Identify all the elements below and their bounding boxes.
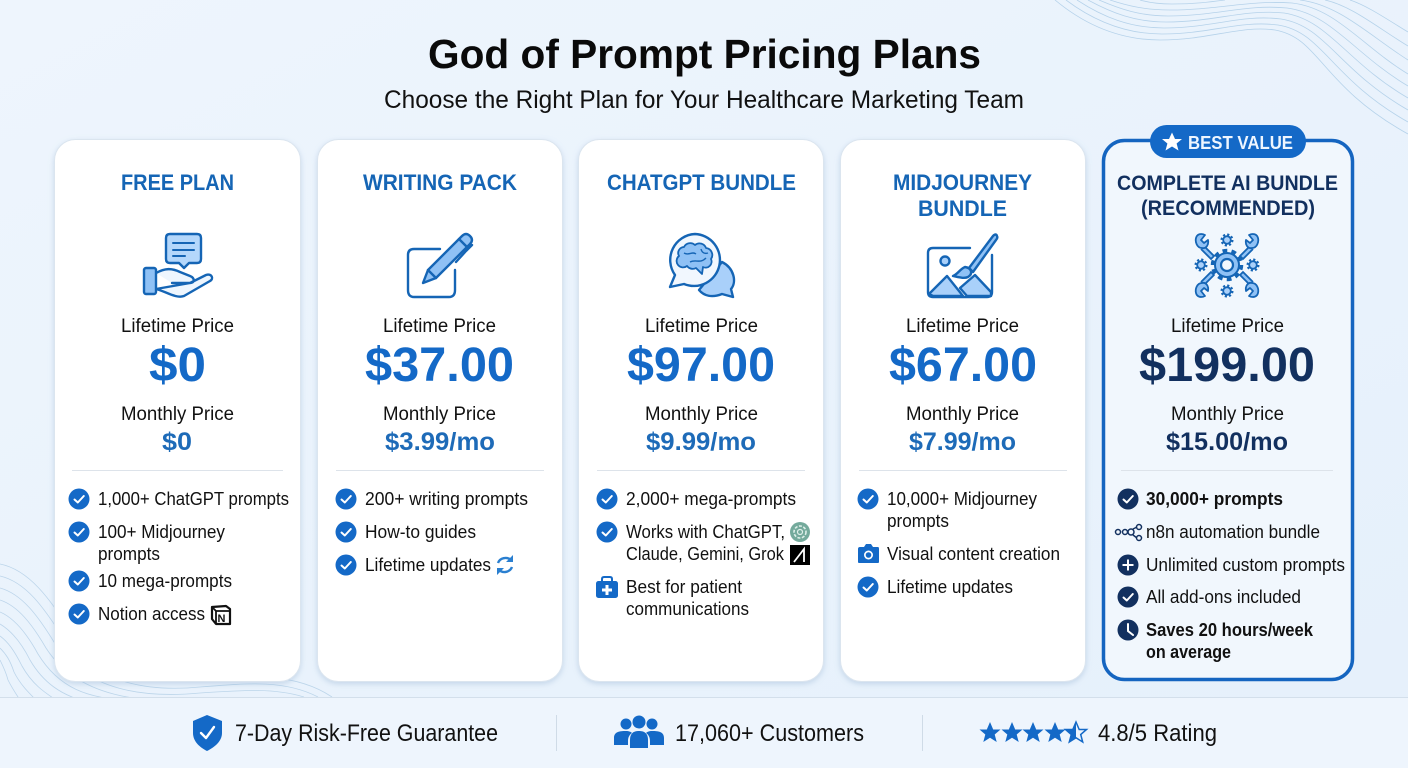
feature: saves 20 hours per week: on average [1146, 642, 1231, 662]
feature: patient communications: communications [626, 599, 749, 619]
best value badge [1150, 125, 1306, 158]
guarantee [193, 715, 498, 751]
monthly price label: Monthly Price [121, 404, 234, 425]
lifetime price label: Lifetime Price [645, 316, 758, 337]
plan name: complete ai bundle: (RECOMMENDED) [1141, 197, 1315, 220]
feature list [1116, 488, 1345, 662]
plan name: chatgpt bundle: CHATGPT BUNDLE [607, 170, 796, 195]
panel: free plan [54, 140, 300, 682]
lifetime price label: Lifetime Price [906, 316, 1019, 337]
plan name: midjourney bundle [893, 170, 1032, 221]
plan name: free plan: FREE PLAN [121, 170, 234, 195]
feature list [68, 488, 289, 625]
monthly price label: Monthly Price [1171, 404, 1284, 425]
icon: brain chat bubbles [670, 234, 734, 297]
panel: midjourney bundle [840, 140, 1086, 682]
feature: saves 20 hours per week: Saves 20 hours/week [1146, 620, 1314, 640]
feature: lifetime updates: Lifetime updates [887, 577, 1013, 597]
feature: midjourney prompts [858, 488, 1037, 531]
feature: mega-prompts: 10 mega-prompts [98, 571, 232, 591]
lifetime price: $37.00 [365, 339, 514, 392]
feature: midjourney prompts: 10,000+ Midjourney [887, 489, 1037, 509]
monthly price label: Monthly Price [906, 404, 1019, 425]
panel: writing pack [318, 140, 562, 682]
plan name: complete ai bundle: COMPLETE AI BUNDLE [1117, 172, 1338, 195]
plan name: writing pack: WRITING PACK [363, 170, 517, 195]
feature: midjourney prompts: 100+ Midjourney [98, 522, 225, 542]
title: God of Prompt Pricing Plans [428, 31, 981, 77]
feature: midjourney prompts [68, 522, 225, 564]
rating stars: 4.8/5 Rating [1098, 720, 1217, 747]
customers: 17,060+ Customers [675, 720, 864, 747]
plan name: midjourney bundle: BUNDLE [918, 196, 1007, 221]
feature: works with models: Works with ChatGPT, [626, 522, 785, 542]
feature: works with models [596, 522, 810, 565]
rating stars [980, 720, 1217, 747]
icon: image and paintbrush [928, 234, 997, 297]
feature: patient communications [596, 577, 749, 619]
monthly price label: Monthly Price [645, 404, 758, 425]
monthly price: $3.99/mo [385, 428, 495, 456]
icon: pen and paper [408, 234, 472, 297]
monthly price: $0 [162, 428, 192, 456]
feature list [596, 488, 810, 619]
feature: visual content creation: Visual content creation [887, 544, 1060, 564]
feature: notion access: N [218, 613, 226, 625]
lifetime price label: Lifetime Price [1171, 316, 1284, 337]
feature: lifetime updates: Lifetime updates [365, 555, 491, 575]
feature: patient communications: Best for patient [626, 577, 742, 597]
monthly price: $15.00/mo [1166, 428, 1288, 456]
feature: works with models: Claude, Gemini, Grok [626, 544, 785, 564]
monthly price: $7.99/mo [909, 428, 1016, 456]
lifetime price: $199.00 [1139, 339, 1315, 392]
feature: unlimited custom prompts: Unlimited custom prompts [1146, 555, 1345, 575]
customers [614, 716, 864, 748]
feature: mega-prompts: 2,000+ mega-prompts [626, 489, 796, 509]
lifetime price label: Lifetime Price [121, 316, 234, 337]
feature: n8n automation bundle: n8n automation bundle [1146, 522, 1320, 542]
lifetime price: $67.00 [889, 339, 1037, 392]
feature: midjourney prompts: prompts [98, 544, 160, 564]
monthly price: $9.99/mo [646, 428, 756, 456]
lifetime price: $0 [149, 339, 206, 392]
feature: all add-ons included: All add-ons included [1146, 587, 1301, 607]
panel: complete ai bundle [1104, 125, 1352, 680]
feature: 30,000+ prompts: 30,000+ prompts [1146, 489, 1283, 509]
feature: midjourney prompts: prompts [887, 511, 949, 531]
plan name: complete ai bundle [1117, 172, 1338, 220]
best value badge: BEST VALUE [1188, 133, 1293, 153]
feature: notion access: Notion access [98, 604, 205, 624]
feature: how-to guides: How-to guides [365, 522, 476, 542]
feature: writing prompts: 200+ writing prompts [365, 489, 528, 509]
feature list [336, 488, 528, 576]
feature list [858, 488, 1060, 598]
subtitle: Choose the Right Plan for Your Healthcare Marketing Team [384, 86, 1024, 114]
icon: hand holding message [144, 234, 212, 297]
icon: gears and wrenches [1196, 234, 1258, 297]
feature: saves 20 hours per week [1118, 620, 1314, 662]
lifetime price label: Lifetime Price [383, 316, 496, 337]
lifetime price: $97.00 [627, 339, 775, 392]
panel: chatgpt bundle [578, 140, 824, 682]
guarantee: 7-Day Risk-Free Guarantee [235, 720, 498, 747]
footer bar [0, 697, 1408, 768]
plan name: midjourney bundle: MIDJOURNEY [893, 170, 1032, 195]
monthly price label: Monthly Price [383, 404, 496, 425]
feature: notion access [68, 604, 230, 625]
feature: chatgpt prompts: 1,000+ ChatGPT prompts [98, 489, 289, 509]
